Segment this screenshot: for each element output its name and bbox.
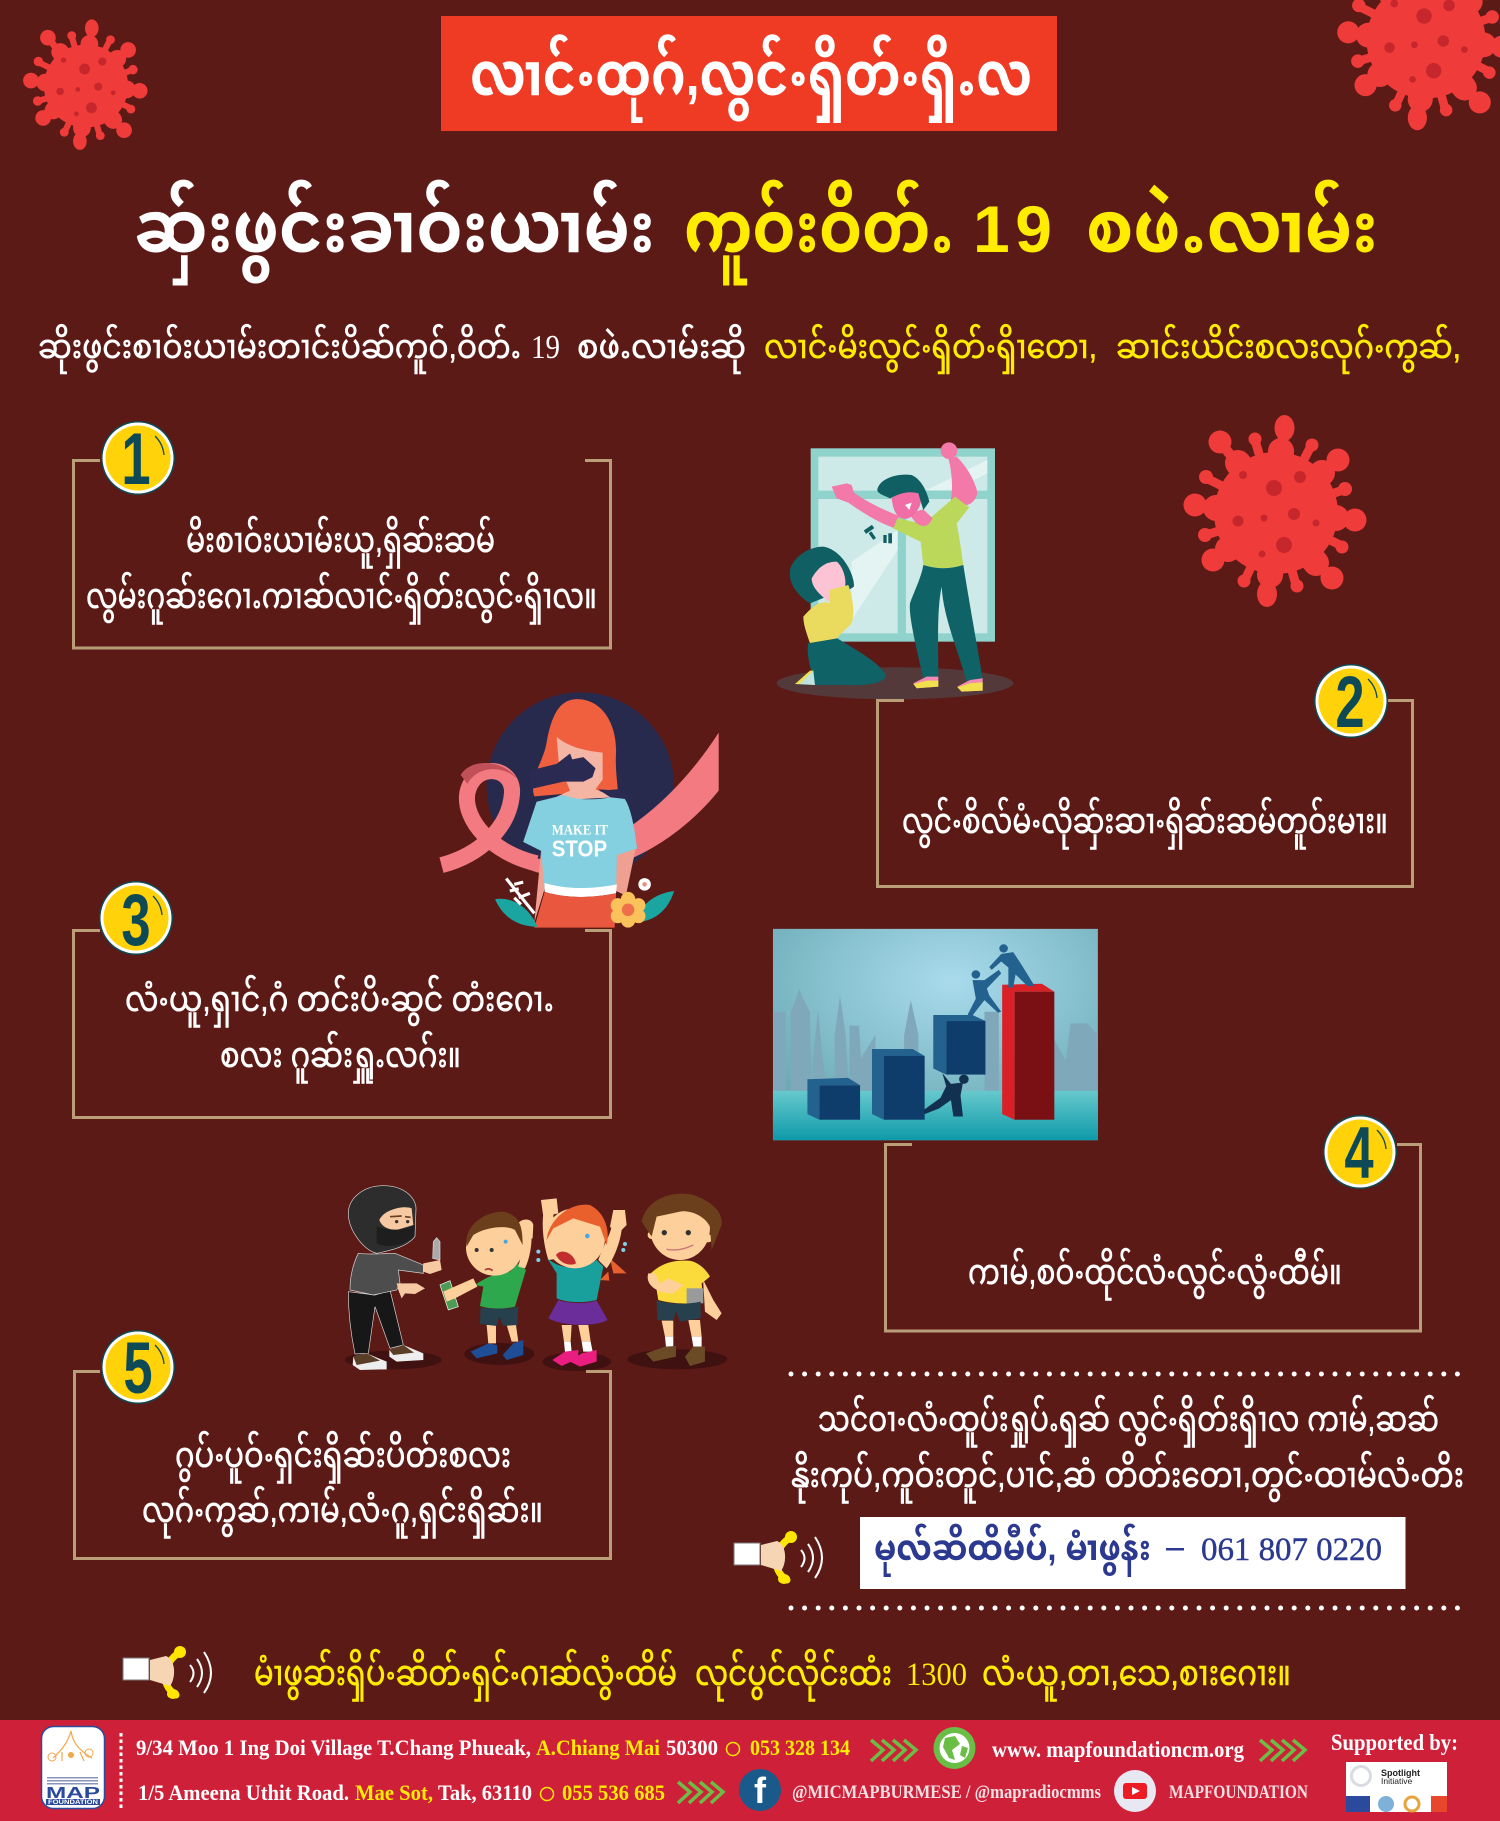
- panel: point 2: [878, 662, 1412, 886]
- icon: phone hotline: [734, 1531, 822, 1584]
- icon: facebook: f: [754, 1770, 767, 1811]
- address Chiang Mai: [136, 1735, 850, 1760]
- advice text: [791, 1394, 1464, 1504]
- arrows: [1260, 1740, 1305, 1761]
- badge 4: 4: [1344, 1113, 1374, 1194]
- illustration: woman with covered mouth: MAKE IT: [552, 821, 608, 838]
- icon: facebook: [739, 1769, 781, 1811]
- icon: virus large: [1184, 415, 1366, 607]
- dotted divider top: [788, 1372, 1460, 1376]
- dotted divider bottom: [788, 1606, 1460, 1610]
- icon: phone national line: [123, 1646, 211, 1699]
- main heading: [134, 179, 1378, 286]
- icon: globe: [934, 1727, 976, 1769]
- logo: MAP Foundation: MAP: [46, 1785, 100, 1802]
- hotline 1300 text: မံၢဖွဆ်းၡိပ်ႋဆိတ်ႋရှင်ႋဂၢဆ်လွံႋထိမ်: [254, 1648, 677, 1702]
- hotline box: မုလ်ဆိထိမီပ်, မံၢဖွန်း: [874, 1523, 1151, 1577]
- address Mae Sot: [138, 1780, 665, 1805]
- address Chiang Mai: 9/34 Moo 1 Ing Doi Village T.Chang Phueak,: [136, 1735, 531, 1760]
- main heading: ကူဝ်းဝိတ်ႉ: [684, 179, 954, 286]
- arrows: [678, 1782, 723, 1803]
- logo: MAP Foundation: FOUNDATION: [48, 1800, 98, 1806]
- icon: virus top left: [23, 19, 148, 150]
- panel: point 3: [74, 880, 610, 1118]
- panel: point 4: [886, 1113, 1420, 1331]
- boy with money: [440, 1212, 533, 1360]
- hotline 1300 text: လုင်ပွင်လိုင်းထံး: [695, 1648, 892, 1702]
- badge 2: 2: [1335, 662, 1365, 743]
- badge 3: 3: [121, 880, 151, 961]
- man pushing block: [923, 1073, 969, 1116]
- sub heading: ဆိုးဖွင်းစၢဝ်းယၢမ်းတၢင်းပိဆ်ကူဝ်,ဝိတ်ႉ: [38, 322, 521, 374]
- badge 1: [101, 419, 175, 500]
- illustration: man shouting at kneeling woman: [777, 442, 1013, 699]
- badge 2: [1314, 662, 1388, 743]
- robber: [348, 1186, 442, 1370]
- text 1: [86, 515, 597, 625]
- panel: point 1: [74, 419, 610, 648]
- sub heading: [38, 322, 1461, 374]
- text 3: [125, 974, 554, 1084]
- illustration: bars and businessmen: [773, 929, 1098, 1140]
- sub heading: 19: [531, 329, 560, 366]
- man climbing: [968, 970, 1001, 1017]
- illustration: robber and children: [345, 1186, 727, 1371]
- text 1: မိးစၢဝ်းယၢမ်းယူ,ရှိဆ်းဆမ်: [186, 515, 495, 569]
- illustration: woman with covered mouth: [441, 692, 719, 928]
- logo: Spotlight Initiative: Initiative: [1381, 1776, 1412, 1786]
- main heading: 19: [973, 192, 1052, 266]
- youtube channel: MAPFOUNDATION: [1169, 1782, 1308, 1803]
- supported by: Supported by:: [1331, 1730, 1458, 1755]
- badge 5: 5: [123, 1328, 153, 1409]
- illustration: woman with covered mouth: STOP: [552, 836, 607, 862]
- title banner: လၢင်ႋထုဂ်,လွင်ႋၡိတ်ႋၡိႉလ: [470, 35, 1032, 123]
- logo: Spotlight Initiative: [1346, 1762, 1447, 1812]
- address Mae Sot: Tak, 63110: [438, 1780, 532, 1805]
- badge 4: [1323, 1113, 1397, 1194]
- sub heading: စဖဲႉလၢမ်းဆို: [577, 322, 746, 374]
- hotline box: [860, 1517, 1406, 1589]
- text 1: လွမ်းဂူဆ်းဂေၢႉကၢဆ်လၢင်ႋၡိတ်းလွင်ႋၡိၢလ။: [86, 571, 597, 625]
- website: www. mapfoundationcm.org: [992, 1737, 1244, 1762]
- address Chiang Mai: 50300: [666, 1735, 718, 1760]
- text 5: ဂွပ်ႋပူဝ်ႋရှင်းၡိဆ်းပိတ်းစလး: [175, 1430, 511, 1484]
- address Mae Sot: 055 536 685: [562, 1780, 665, 1805]
- sub heading: လၢင်ႋမိးလွင်ႋၡိတ်ႋၡိၢတေၢ,: [764, 322, 1097, 374]
- text 3: လံႋယူ,ရှၢင်,ဂံ တင်းပိႋဆွင် တံးဂေၢႉ: [125, 974, 554, 1028]
- social handles: @MICMAPBURMESE / @mapradiocmms: [792, 1782, 1101, 1803]
- crying girl: [536, 1198, 627, 1367]
- badge 3: [99, 880, 173, 961]
- arrows: [871, 1740, 916, 1761]
- man pulling: [989, 944, 1035, 988]
- sub heading: ဆၢင်းယိင်းစလးလုဂ်ႋကွဆ်,: [1116, 322, 1461, 374]
- main heading: ဆှ်းဖွင်းခၢဝ်းယၢမ်း: [134, 179, 655, 286]
- address Mae Sot: 1/5 Ameena Uthit Road.: [138, 1780, 349, 1805]
- badge 5: [101, 1328, 175, 1409]
- footer band: [0, 1720, 1500, 1821]
- hotline 1300 text: [254, 1648, 1291, 1702]
- smiling boy: [642, 1194, 722, 1366]
- logo: MAP Foundation: [42, 1726, 104, 1808]
- text 5: လုဂ်ႋကွဆ်,ကၢမ်,လံႋဂူ,ရှင်းၡိဆ်း။: [142, 1485, 543, 1539]
- hotline 1300 text: 1300: [906, 1657, 967, 1693]
- icon: virus top right: [1337, 0, 1500, 130]
- text 4: ကၢမ်,စဝ်ႋထိုင်လံႋလွင်ႋလွံႋထီမ်။: [968, 1247, 1342, 1301]
- main heading: စဖဲႉလၢမ်း: [1086, 179, 1378, 268]
- address Mae Sot: Mae Sot,: [355, 1780, 433, 1805]
- logo: Spotlight Initiative: Spotlight: [1381, 1768, 1420, 1778]
- text 3: စလး ဂူဆ်းရှူႉလဂ်း။: [220, 1030, 461, 1084]
- hotline box: 061 807 0220: [1201, 1532, 1382, 1568]
- title banner: [441, 16, 1057, 131]
- text 5: [142, 1430, 543, 1539]
- badge 1: 1: [121, 419, 151, 500]
- panel: point 5: [74, 1328, 610, 1558]
- hotline 1300 text: လံႋယူ,တၢ,သေ,စၢးဂေၢး။: [982, 1652, 1291, 1702]
- address Chiang Mai: A.Chiang Mai: [536, 1735, 660, 1760]
- icon: youtube: [1114, 1770, 1156, 1812]
- address Chiang Mai: 053 328 134: [750, 1735, 850, 1760]
